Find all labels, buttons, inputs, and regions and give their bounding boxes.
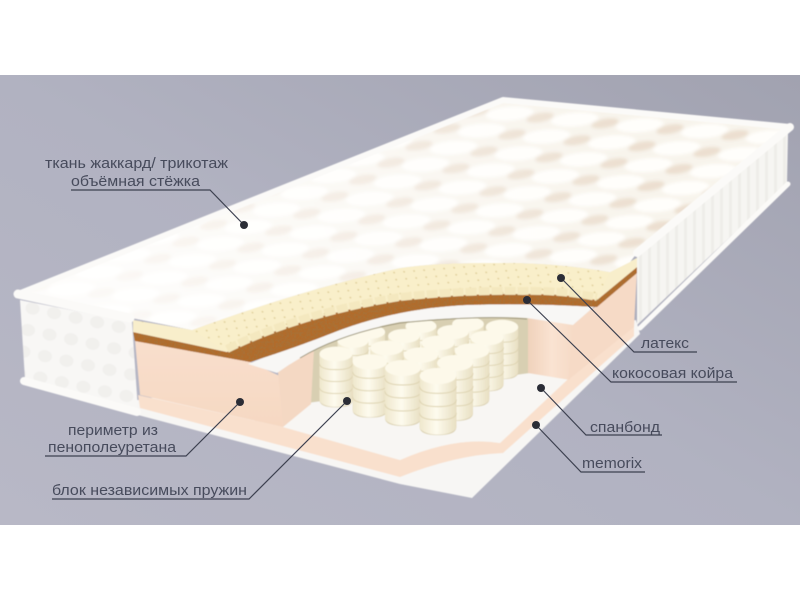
memorix foam strip <box>138 325 634 477</box>
spunbond floor <box>283 373 567 460</box>
latex layer <box>133 258 637 352</box>
left foam perimeter <box>135 340 314 427</box>
label: fabric: объёмная стёжка <box>71 174 201 190</box>
edge piping <box>18 100 790 412</box>
independent spring block <box>319 317 518 435</box>
label: coconut coir: кокосовая койра <box>612 366 734 382</box>
label: spring block <box>52 397 351 499</box>
label: spunbond <box>537 384 662 436</box>
label: foam perimeter: периметр из <box>68 423 158 439</box>
label: memorix <box>532 421 645 472</box>
base white layer <box>22 320 640 498</box>
label: latex: латекс <box>641 336 689 352</box>
label: fabric <box>45 156 248 229</box>
label: spring block: блок независимых пружин <box>52 483 247 499</box>
label: memorix: memorix <box>582 456 643 472</box>
left side panel <box>20 300 138 410</box>
label: fabric: ткань жаккард/ трикотаж <box>45 156 228 172</box>
right foam perimeter <box>528 271 637 380</box>
label: latex <box>557 274 697 352</box>
upper spunbond arc <box>248 301 597 373</box>
coconut coir layer <box>133 266 637 362</box>
label: spunbond: спанбонд <box>590 420 661 436</box>
mattress cutaway <box>0 90 800 498</box>
label: foam perimeter <box>45 398 244 456</box>
right side panel <box>637 132 788 325</box>
pale cavity behind springs <box>300 300 530 404</box>
label: coconut coir <box>523 296 737 382</box>
label: foam perimeter: пенополеуретана <box>48 440 177 456</box>
background panel <box>0 75 800 525</box>
quilted top cover <box>30 102 781 330</box>
arc underside shadow <box>300 318 527 358</box>
